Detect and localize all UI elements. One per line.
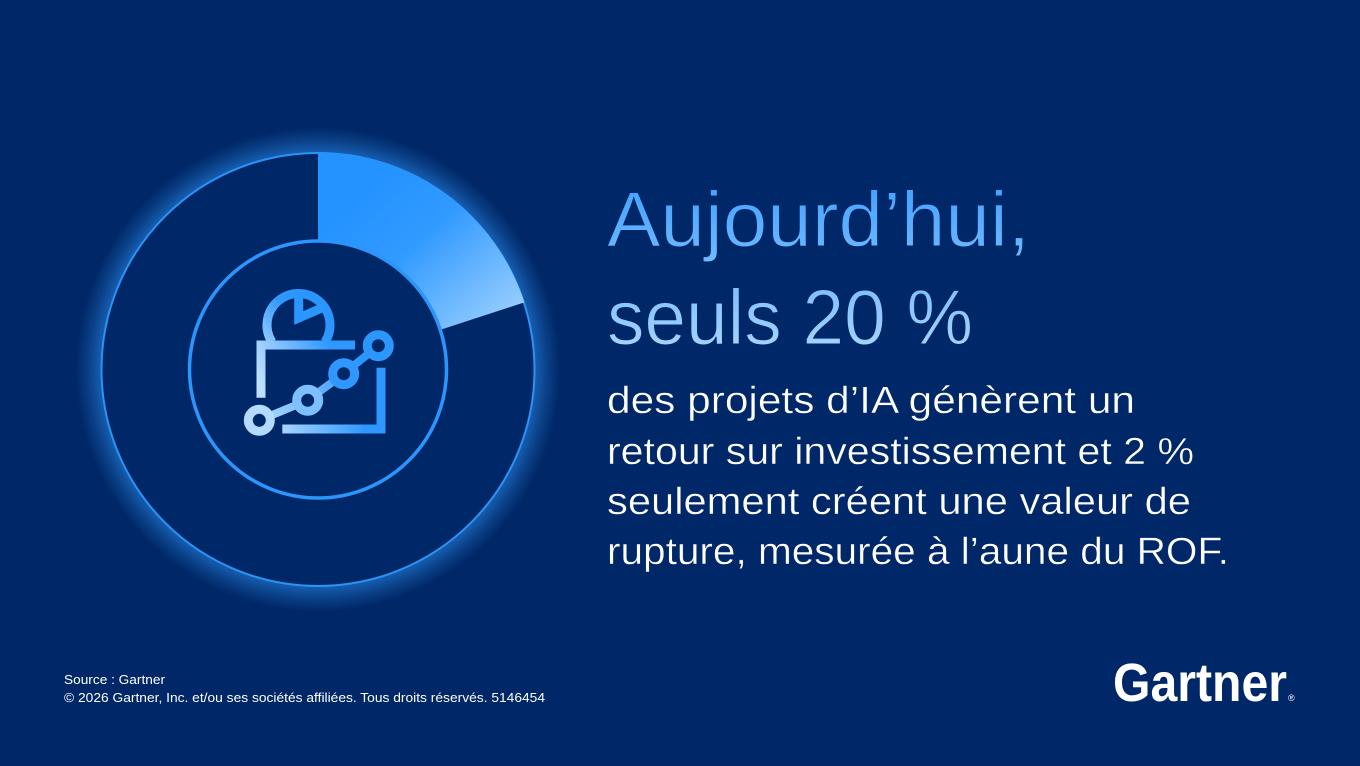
source and copyright: Source : Gartner — [64, 672, 166, 687]
icon: pie slice — [299, 292, 324, 318]
inner ring — [190, 241, 446, 498]
icon: clock-style pie — [267, 293, 330, 342]
icon: frame top left — [261, 345, 355, 398]
headline: seuls 20 % — [607, 273, 973, 361]
source and copyright: © 2026 Gartner, Inc. et/ou ses sociétés affiliées. Tous droits réservés. 5146454 — [64, 690, 545, 705]
body text: seulement créent une valeur de — [607, 481, 1191, 523]
outer glow — [76, 128, 560, 612]
source and copyright — [64, 672, 545, 705]
icon: trend line — [259, 346, 378, 420]
wedge 20 percent — [318, 152, 524, 330]
headline — [607, 175, 1030, 361]
donut chart: 20 % — [76, 128, 560, 612]
headline: Aujourd’hui, — [607, 175, 1030, 263]
icon: frame bottom right — [282, 368, 381, 429]
donut base — [102, 153, 534, 586]
icon: pie chart and growth line — [248, 292, 389, 431]
body text: retour sur investissement et 2 % — [607, 431, 1194, 473]
body text — [607, 380, 1229, 573]
Gartner logo: ® — [1288, 693, 1295, 703]
body text: rupture, mesurée à l’aune du ROF. — [607, 531, 1229, 573]
icon: data nodes — [248, 335, 389, 431]
Gartner logo: Gartner — [1113, 653, 1287, 713]
body text: des projets d’IA génèrent un — [607, 380, 1135, 422]
